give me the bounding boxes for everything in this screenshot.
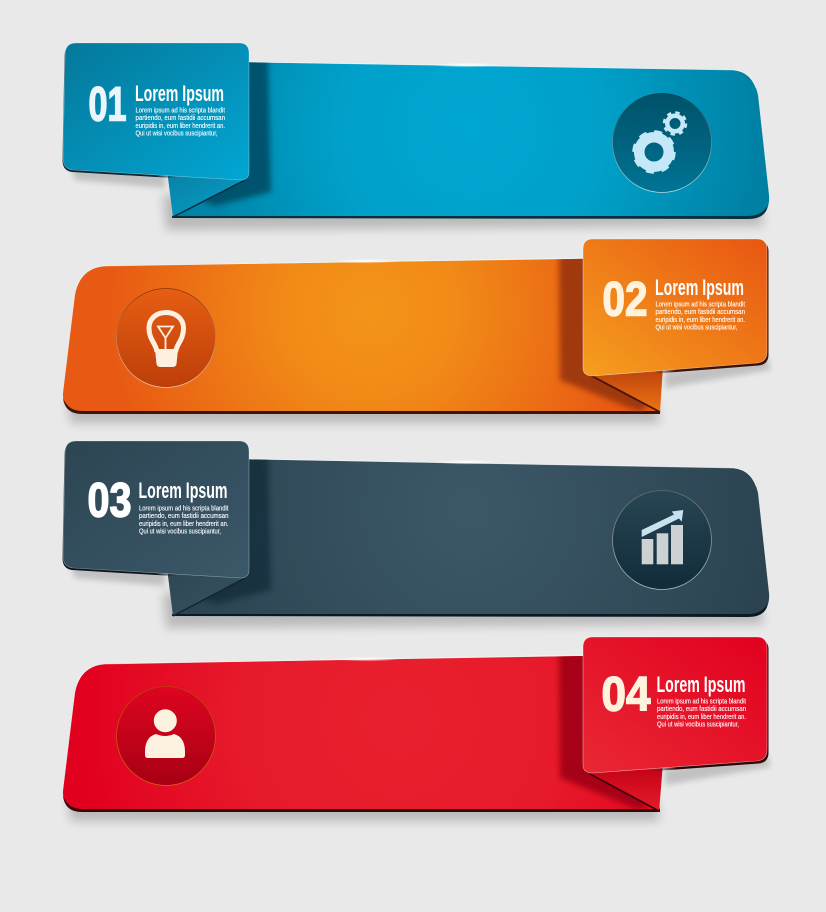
ribbon bottom edge 03 bbox=[172, 603, 768, 617]
ground shadow 01 bbox=[163, 195, 764, 230]
tab dark edge 01 bbox=[62, 45, 248, 182]
fold line 04 bbox=[590, 774, 659, 811]
body text 03: euripidis in, eum liber hendrerit an. bbox=[139, 519, 228, 528]
tab shadow 01 bbox=[68, 160, 165, 188]
tab dark edge 02 bbox=[584, 242, 768, 378]
ribbon body 03 bbox=[172, 459, 769, 615]
icon: light bulb bbox=[149, 312, 184, 367]
body text 02 bbox=[656, 300, 745, 332]
ground shadow 02 bbox=[68, 398, 660, 423]
icon: rising bar chart bbox=[642, 510, 683, 564]
top highlight 03 bbox=[250, 459, 756, 486]
body text 02: Qui ut wisi vocibus suscipiantur, bbox=[656, 322, 738, 332]
body text 01: euripidis in, eum liber hendrerit an. bbox=[136, 121, 225, 130]
fold line 01 bbox=[173, 180, 245, 217]
tab cast shadow 04 bbox=[556, 656, 648, 810]
fold flap 04 bbox=[590, 763, 663, 812]
ribbon bottom edge 02 bbox=[63, 398, 660, 414]
ground shadow 04 bbox=[68, 796, 660, 821]
tab 03 bbox=[63, 441, 249, 578]
top highlight 01 bbox=[250, 62, 756, 88]
icon circle 01 bbox=[612, 94, 712, 192]
fold line 02 bbox=[590, 375, 660, 412]
banner 04: red bbox=[63, 637, 770, 821]
fold flap 02 bbox=[590, 366, 663, 412]
top sheen 04 bbox=[333, 656, 401, 662]
fold flap 01 bbox=[167, 170, 245, 217]
title 04: Lorem Ipsum bbox=[656, 672, 746, 697]
body text 02: partiendo, eum fastidii accumsan bbox=[656, 307, 745, 316]
body text 02: euripidis in, eum liber hendrerit an. bbox=[656, 315, 745, 324]
body text 01: Lorem ipsum ad his scripta blandit bbox=[136, 106, 225, 114]
body text 03: partiendo, eum fastidii accumsan bbox=[139, 511, 228, 520]
ribbon body 02 bbox=[63, 258, 660, 412]
number 04: 04 bbox=[602, 668, 651, 722]
tab shadow 03 bbox=[68, 558, 165, 586]
ground shadow 03 bbox=[163, 593, 764, 628]
tab ground shadow 02 bbox=[665, 358, 770, 388]
top sheen 03 bbox=[432, 460, 500, 464]
title 02: Lorem Ipsum bbox=[655, 275, 744, 300]
icon circle 02 bbox=[116, 288, 216, 388]
banner 02: orange bbox=[63, 239, 770, 423]
tab cast shadow 02 bbox=[556, 258, 650, 412]
body text 01: partiendo, eum fastidii accumsan bbox=[136, 113, 225, 122]
tab 01 bbox=[63, 43, 249, 180]
icon: person bbox=[145, 709, 185, 758]
tab 04 bbox=[583, 637, 767, 773]
top sheen 02 bbox=[333, 258, 401, 264]
top sheen 01 bbox=[432, 62, 500, 68]
icon circle 04 bbox=[116, 686, 216, 786]
number 02: 02 bbox=[602, 274, 648, 326]
body text 03: Qui ut wisi vocibus suscipiantur, bbox=[139, 526, 221, 536]
banner 01: blue bbox=[62, 43, 769, 230]
tab cast shadow 01 bbox=[202, 62, 274, 208]
body text 04 bbox=[657, 696, 746, 728]
body text 01: Qui ut wisi vocibus suscipiantur, bbox=[136, 128, 218, 138]
title 01: Lorem Ipsum bbox=[135, 81, 224, 106]
ribbon body 04 bbox=[63, 655, 660, 810]
ribbon body 01 bbox=[172, 62, 769, 217]
ribbon bottom edge 01 bbox=[172, 205, 768, 219]
icon: gears bbox=[634, 112, 686, 172]
tab dark edge 04 bbox=[584, 640, 768, 776]
number 03: 03 bbox=[88, 474, 132, 528]
top highlight 02 bbox=[77, 258, 583, 285]
body text 03 bbox=[139, 504, 229, 536]
number 01: 01 bbox=[88, 78, 126, 132]
body text 01 bbox=[136, 106, 225, 138]
body text 03: Lorem ipsum ad his scripta blandit bbox=[139, 504, 229, 512]
tab 02 bbox=[583, 239, 767, 376]
tab ground shadow 04 bbox=[665, 755, 770, 785]
icon circle 03 bbox=[612, 490, 712, 590]
infographic: four folded banners bbox=[62, 43, 772, 826]
body text 02: Lorem ipsum ad his scripta blandit bbox=[656, 300, 745, 308]
fold line 03 bbox=[173, 578, 245, 616]
fold flap 03 bbox=[167, 568, 245, 616]
body text 04: partiendo, eum fastidii accumsan bbox=[657, 704, 746, 713]
top highlight 04 bbox=[77, 655, 583, 683]
title 03: Lorem Ipsum bbox=[138, 478, 228, 503]
tab dark edge 03 bbox=[62, 443, 248, 580]
ribbon bottom edge 04 bbox=[63, 796, 660, 812]
body text 04: euripidis in, eum liber hendrerit an. bbox=[657, 712, 746, 721]
banner 03: slate bbox=[62, 441, 769, 628]
body text 04: Lorem ipsum ad his scripta blandit bbox=[657, 696, 746, 706]
body text 04: Qui ut wisi vocibus suscipiantur, bbox=[657, 720, 739, 728]
tab cast shadow 03 bbox=[203, 459, 274, 606]
